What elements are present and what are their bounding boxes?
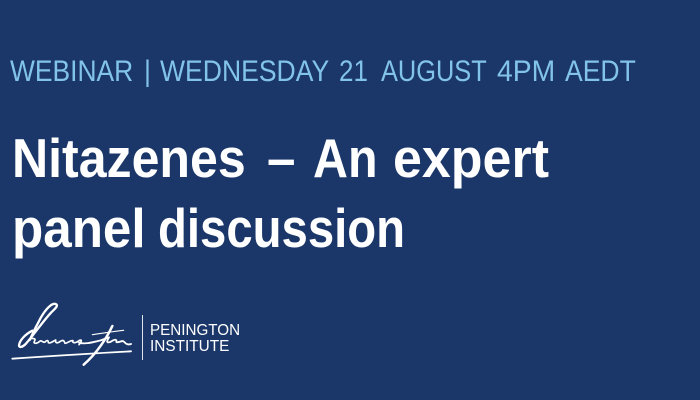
event line: 21: [339, 55, 368, 88]
event line: WEDNESDAY: [160, 55, 329, 88]
logo text: [150, 322, 240, 355]
icon: signature: [11, 302, 132, 366]
event line: AUGUST: [381, 55, 487, 88]
title: An: [313, 127, 378, 189]
logo text: INSTITUTE: [150, 338, 229, 355]
title: [12, 127, 549, 259]
title: Nitazenes: [12, 127, 246, 189]
title: discussion: [158, 197, 405, 259]
title: panel: [12, 197, 146, 259]
logo text: PENINGTON: [150, 322, 240, 338]
title: –: [267, 127, 295, 189]
event line: |: [144, 55, 151, 88]
event line: WEBINAR: [10, 55, 133, 88]
event line: 4PM: [497, 55, 555, 88]
event line: AEDT: [565, 55, 636, 88]
divider: [142, 315, 143, 360]
event line: [10, 55, 636, 88]
logo: [11, 302, 240, 366]
title: expert: [393, 127, 549, 189]
